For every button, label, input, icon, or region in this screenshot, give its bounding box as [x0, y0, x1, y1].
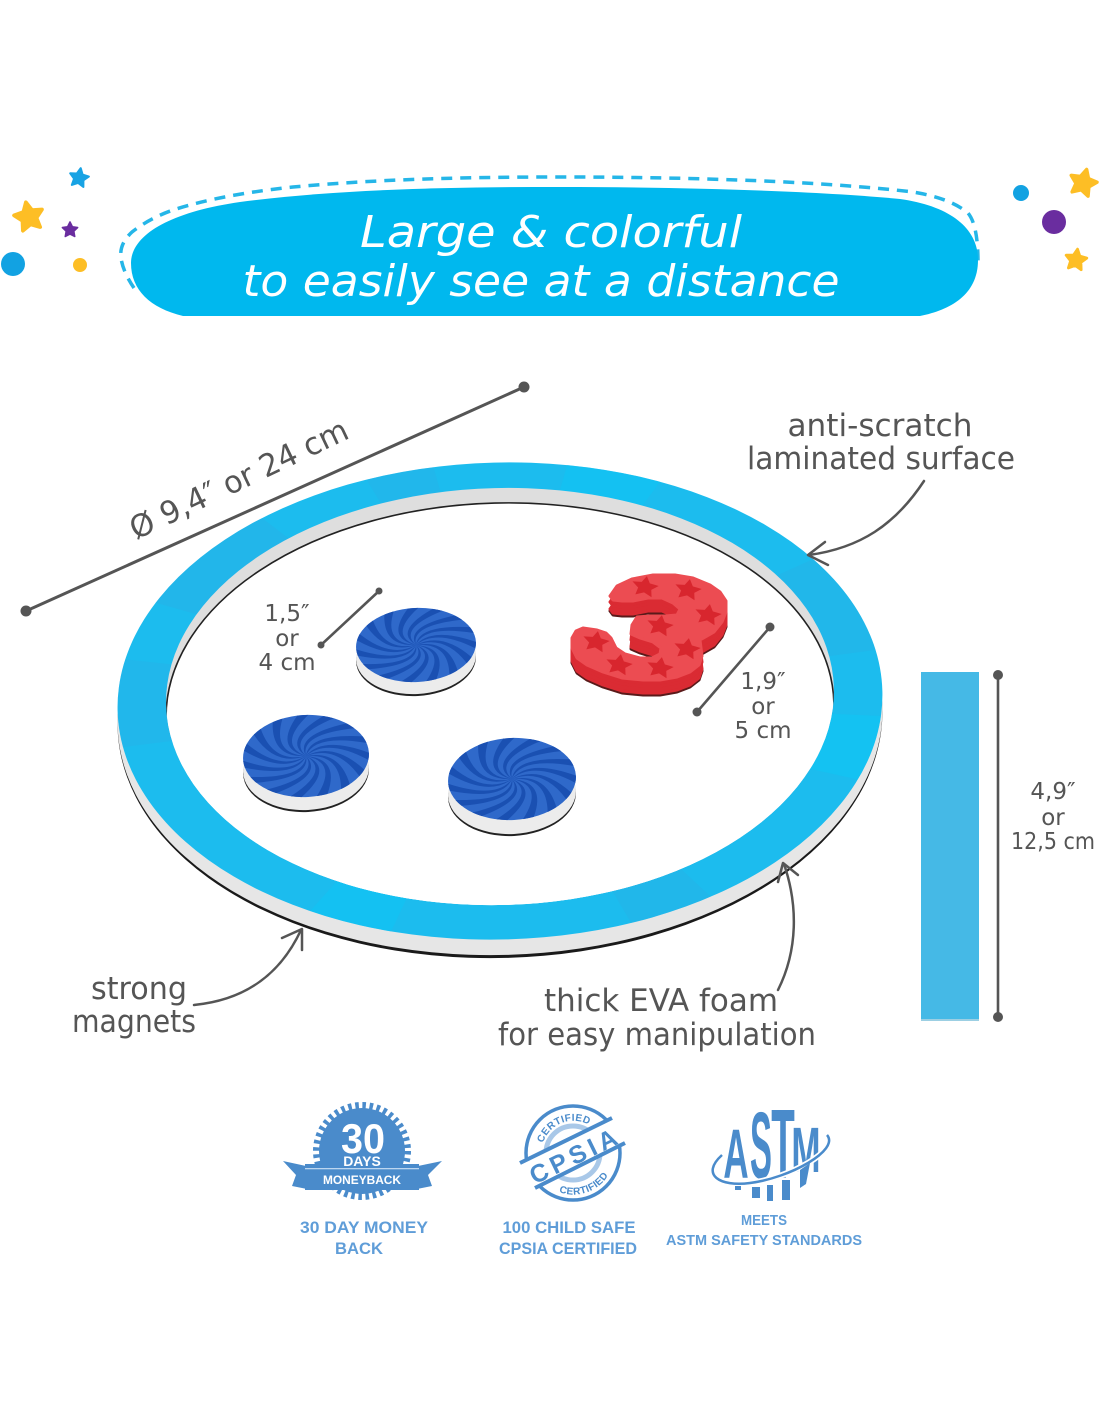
badge: 30 days moneyback: 30: [341, 1115, 385, 1162]
decorative stars right: [1013, 166, 1099, 270]
diameter label: Ø 9,4″ or 24 cm: [124, 412, 354, 547]
puck dimension label: or: [275, 626, 299, 652]
puck dimension label: 4 cm: [258, 650, 316, 676]
ring top face: [111, 453, 889, 949]
caption: CPSIA certified: 100 CHILD SAFE: [502, 1218, 636, 1237]
badge: CPSIA certified: CERTIFIED: [538, 1114, 590, 1142]
badge: 30 days moneyback: [283, 1106, 442, 1196]
puck: left: [239, 711, 372, 815]
badge: 30 days moneyback: DAYS: [343, 1153, 381, 1169]
caption: ASTM safety standards: ASTM SAFETY STANDARDS: [666, 1232, 862, 1249]
callout: thick EVA foam: thick EVA foam: [544, 983, 778, 1019]
foam ring: [118, 462, 882, 958]
number dimension label: [734, 669, 792, 744]
red foam number 3: [572, 574, 726, 695]
banner shape: [131, 187, 978, 316]
badge: ASTM: T: [771, 1090, 795, 1199]
puck dimension label: 1,5″: [264, 601, 310, 627]
caption: 30 day money back: 30 DAY MONEY: [300, 1218, 429, 1237]
badge: CPSIA certified: CERTIFIED: [560, 1172, 607, 1195]
number dimension label: 1,9″: [740, 669, 786, 695]
diameter dimension line: [20, 382, 530, 616]
strip dimension label: or: [1041, 805, 1065, 831]
caption: CPSIA certified: [499, 1218, 637, 1258]
strip dimension line: [993, 670, 1003, 1022]
callout: anti-scratch laminated surface: [747, 408, 1015, 477]
banner title text: Large & colorful: [360, 207, 743, 258]
puck: top: [352, 604, 479, 699]
callout: thick EVA foam: for easy manipulation: [498, 1017, 816, 1053]
title banner: [121, 177, 978, 316]
strip dimension label: 4,9″: [1030, 779, 1076, 805]
arrow: anti-scratch: [808, 481, 924, 565]
badge: CPSIA certified: CPSIA: [525, 1124, 622, 1190]
callout: strong magnets: [72, 971, 196, 1040]
strip dimension label: [1011, 779, 1095, 855]
callout: strong magnets: strong: [91, 971, 187, 1007]
ring hole floor: [166, 502, 834, 906]
callout: strong magnets: magnets: [72, 1004, 196, 1040]
puck: right: [444, 734, 579, 839]
banner dashed outline: [121, 177, 978, 288]
badge: ASTM: A: [723, 1115, 749, 1193]
ribbon: [283, 1161, 442, 1190]
callout: thick EVA foam: [498, 983, 816, 1053]
puck dimension label: [258, 601, 316, 676]
badge: ASTM: [713, 1090, 829, 1201]
callout: anti-scratch laminated surface: laminated surface: [747, 441, 1015, 477]
puck dimension line: [318, 588, 382, 648]
badge: ASTM: M: [791, 1114, 821, 1186]
caption: ASTM safety standards: [666, 1212, 862, 1249]
banner subtitle text: to easily see at a distance: [242, 256, 840, 307]
ring facets: [20, 350, 980, 1040]
caption: 30 day money back: BACK: [335, 1239, 384, 1258]
callout: anti-scratch laminated surface: anti-scratch: [788, 408, 972, 444]
ring hole wall: [161, 479, 839, 914]
arrow: thick EVA foam: [778, 863, 798, 990]
blue foam strip: [921, 672, 979, 1021]
caption: ASTM safety standards: MEETS: [741, 1212, 787, 1229]
ring side edge: [111, 468, 889, 968]
badge: 30 days moneyback: MONEYBACK: [323, 1173, 401, 1187]
number dimension label: 5 cm: [734, 718, 792, 744]
decorative stars left: [1, 167, 90, 276]
number dimension label: or: [751, 694, 775, 720]
arrow: strong magnets: [194, 929, 302, 1005]
badge: ASTM: S: [750, 1093, 772, 1198]
badge: CPSIA certified: [519, 1104, 626, 1202]
caption: CPSIA certified: CPSIA CERTIFIED: [499, 1239, 637, 1258]
number dimension line: [692, 622, 774, 716]
caption: 30 day money back: [300, 1218, 429, 1258]
